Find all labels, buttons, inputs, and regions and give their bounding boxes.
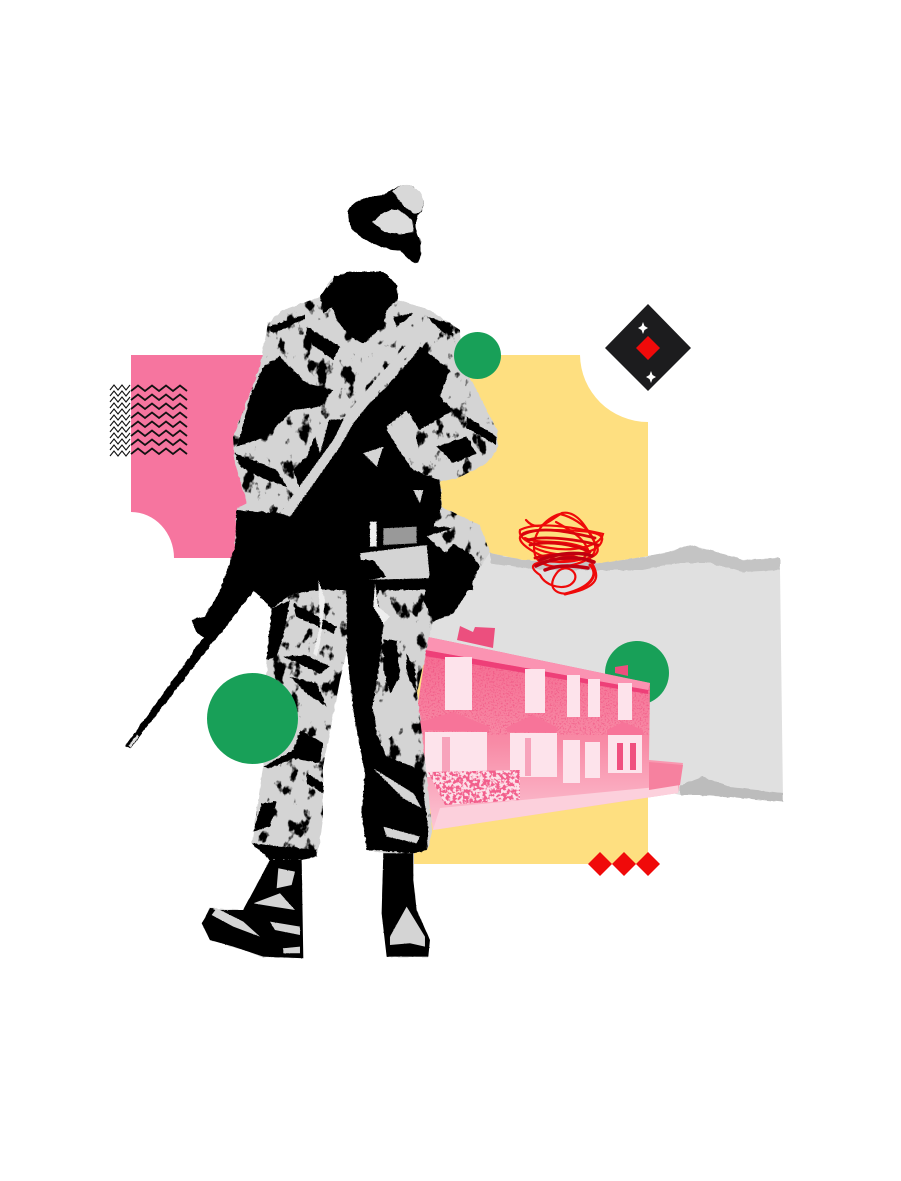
lower body dark areas xyxy=(240,560,428,860)
canvas bag xyxy=(423,543,480,622)
military insignia diamond xyxy=(605,304,691,391)
bay roofs xyxy=(420,712,643,735)
green circle behind house xyxy=(605,641,669,705)
pink panel with cut corner xyxy=(131,355,270,558)
house walls and pavement xyxy=(417,637,683,830)
eaves shadow xyxy=(425,650,648,694)
rifle xyxy=(125,550,262,749)
yellow panel with cut corner xyxy=(414,355,648,864)
lower windows and doors xyxy=(425,732,642,783)
pink terraced houses xyxy=(415,626,685,830)
hedge xyxy=(428,770,520,805)
detached beret xyxy=(348,185,423,263)
beret pompom xyxy=(392,185,423,214)
garden wall xyxy=(649,762,683,790)
pavement xyxy=(433,785,678,830)
chimneys xyxy=(457,626,628,676)
torn grey paper xyxy=(420,545,783,802)
upper windows xyxy=(445,657,632,720)
green circle upper xyxy=(454,332,501,379)
white stars xyxy=(638,322,656,383)
roof xyxy=(425,637,650,690)
upper body light details xyxy=(280,337,430,580)
soldier silhouette xyxy=(125,270,500,960)
left boot xyxy=(202,860,303,958)
upper body dark areas xyxy=(220,272,497,590)
chevron pattern swatch xyxy=(110,385,187,456)
red centre diamond xyxy=(636,336,660,360)
halftone mottling xyxy=(200,270,500,960)
window mullions xyxy=(442,737,636,777)
jacket and trousers grey base xyxy=(202,272,498,958)
green circle lower xyxy=(207,673,298,764)
beret shape xyxy=(348,185,423,263)
row of three red diamonds xyxy=(588,852,660,876)
lower body light details xyxy=(313,580,422,843)
right boot xyxy=(382,853,430,957)
collage illustration xyxy=(110,184,784,959)
brick speckle xyxy=(418,641,650,735)
red scribble xyxy=(520,513,603,594)
beret highlight xyxy=(372,209,414,234)
